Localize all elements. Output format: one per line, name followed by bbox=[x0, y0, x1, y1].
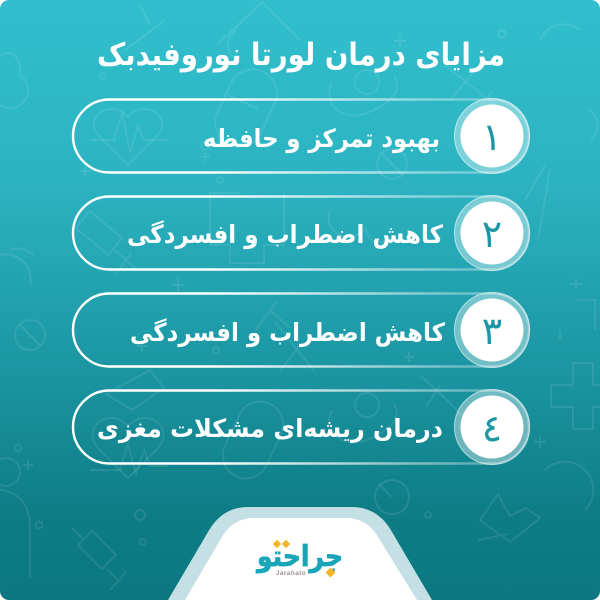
benefit row 3 bbox=[73, 292, 530, 368]
benefit row 2 bbox=[73, 196, 530, 270]
benefit text 4: درمان ریشه‌ای مشکلات مغزی bbox=[97, 414, 443, 444]
number badge 4 bbox=[454, 390, 530, 464]
number badge 1: ١ bbox=[482, 115, 502, 159]
number badge 4: ٤ bbox=[482, 406, 502, 450]
title: مزایای درمان لورتا نوروفیدبک bbox=[97, 37, 505, 73]
logo accent dots bbox=[273, 540, 335, 577]
number badge 1 bbox=[454, 98, 530, 174]
benefit text 2: کاهش اضطراب و افسردگی bbox=[127, 220, 443, 250]
number badge 2 bbox=[454, 196, 530, 270]
pill outline 1 bbox=[73, 100, 529, 172]
benefit row 4 bbox=[73, 390, 530, 464]
number badge 2: ٢ bbox=[482, 212, 502, 256]
logo wordmark: جراحتو bbox=[255, 539, 343, 573]
benefit text 3: کاهش اضطراب و افسردگی bbox=[130, 318, 445, 348]
logo bbox=[255, 539, 343, 577]
footer tab outer shape bbox=[168, 507, 432, 600]
logo latin name: Jarahato bbox=[276, 570, 306, 577]
benefit text 1: بهبود تمرکز و حافظه bbox=[203, 124, 440, 154]
pill outline 4 bbox=[73, 390, 529, 464]
number badge 3: ٣ bbox=[482, 309, 502, 353]
number badge 3 bbox=[454, 292, 530, 368]
benefit row 1 bbox=[73, 98, 530, 174]
pill outline 2 bbox=[73, 196, 529, 270]
footer tab with logo bbox=[168, 507, 432, 600]
pill outline 3 bbox=[73, 294, 529, 366]
footer tab inner white shape bbox=[185, 518, 417, 600]
